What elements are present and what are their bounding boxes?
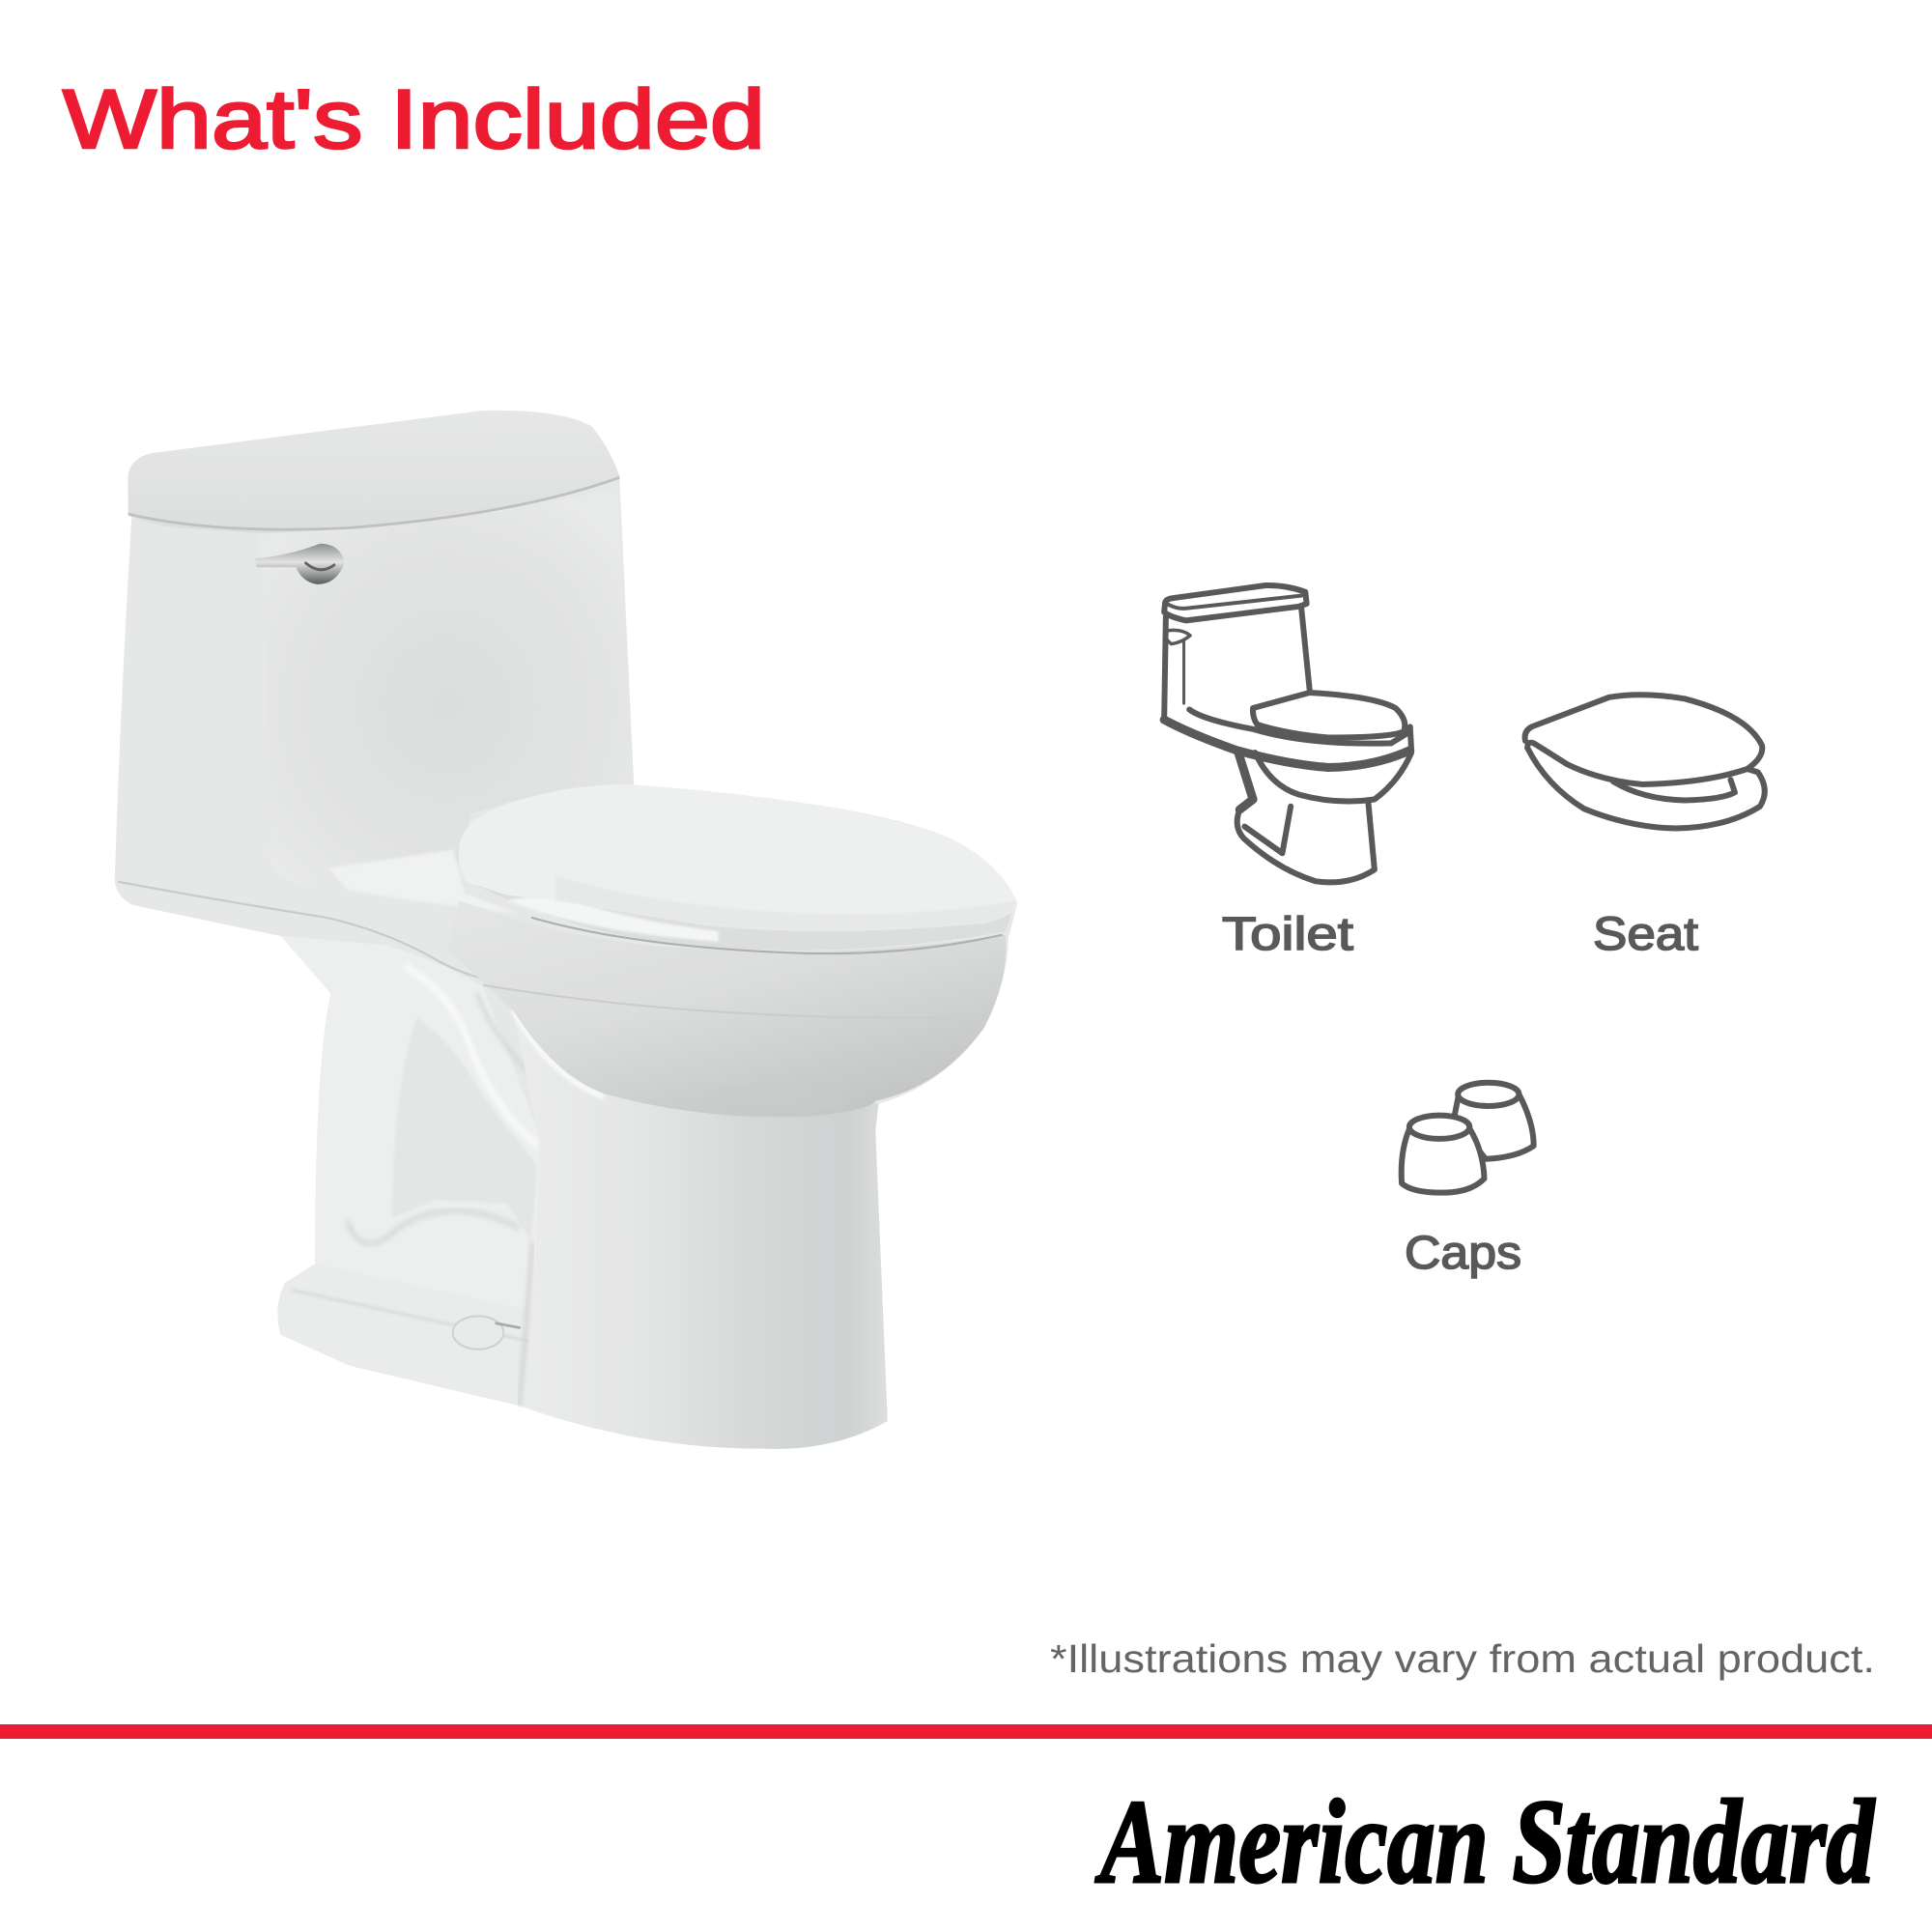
- tank lid: [128, 411, 619, 533]
- bowl: [446, 900, 1006, 1117]
- seat lid: [459, 784, 1017, 931]
- pedestal: [513, 1010, 888, 1449]
- silhouette: [115, 411, 1017, 1449]
- label: toilet: Toilet: [1222, 909, 1353, 960]
- flange bolt cap: [453, 1316, 521, 1350]
- trapway tube recess: [392, 1017, 537, 1241]
- label: seat: Seat: [1593, 909, 1698, 960]
- icon: caps: [1402, 1083, 1534, 1193]
- icon: toilet: [1164, 585, 1411, 882]
- title: What's Included: [63, 73, 765, 166]
- panel: included parts icons: [1164, 585, 1765, 1193]
- footnote: *Illustrations may vary from actual product.: [1050, 1636, 1875, 1681]
- tank front panel: [260, 487, 634, 885]
- icon: seat: [1525, 695, 1765, 829]
- floor flange: [277, 1264, 532, 1407]
- seat ring: [465, 876, 1011, 951]
- under-deck trapway: [281, 936, 543, 1318]
- product photo: one-piece toilet: [115, 411, 1017, 1449]
- red divider bar: [0, 1724, 1932, 1739]
- label: caps: Caps: [1405, 1228, 1521, 1279]
- flush handle: [255, 544, 345, 584]
- deck highlights: [329, 850, 520, 914]
